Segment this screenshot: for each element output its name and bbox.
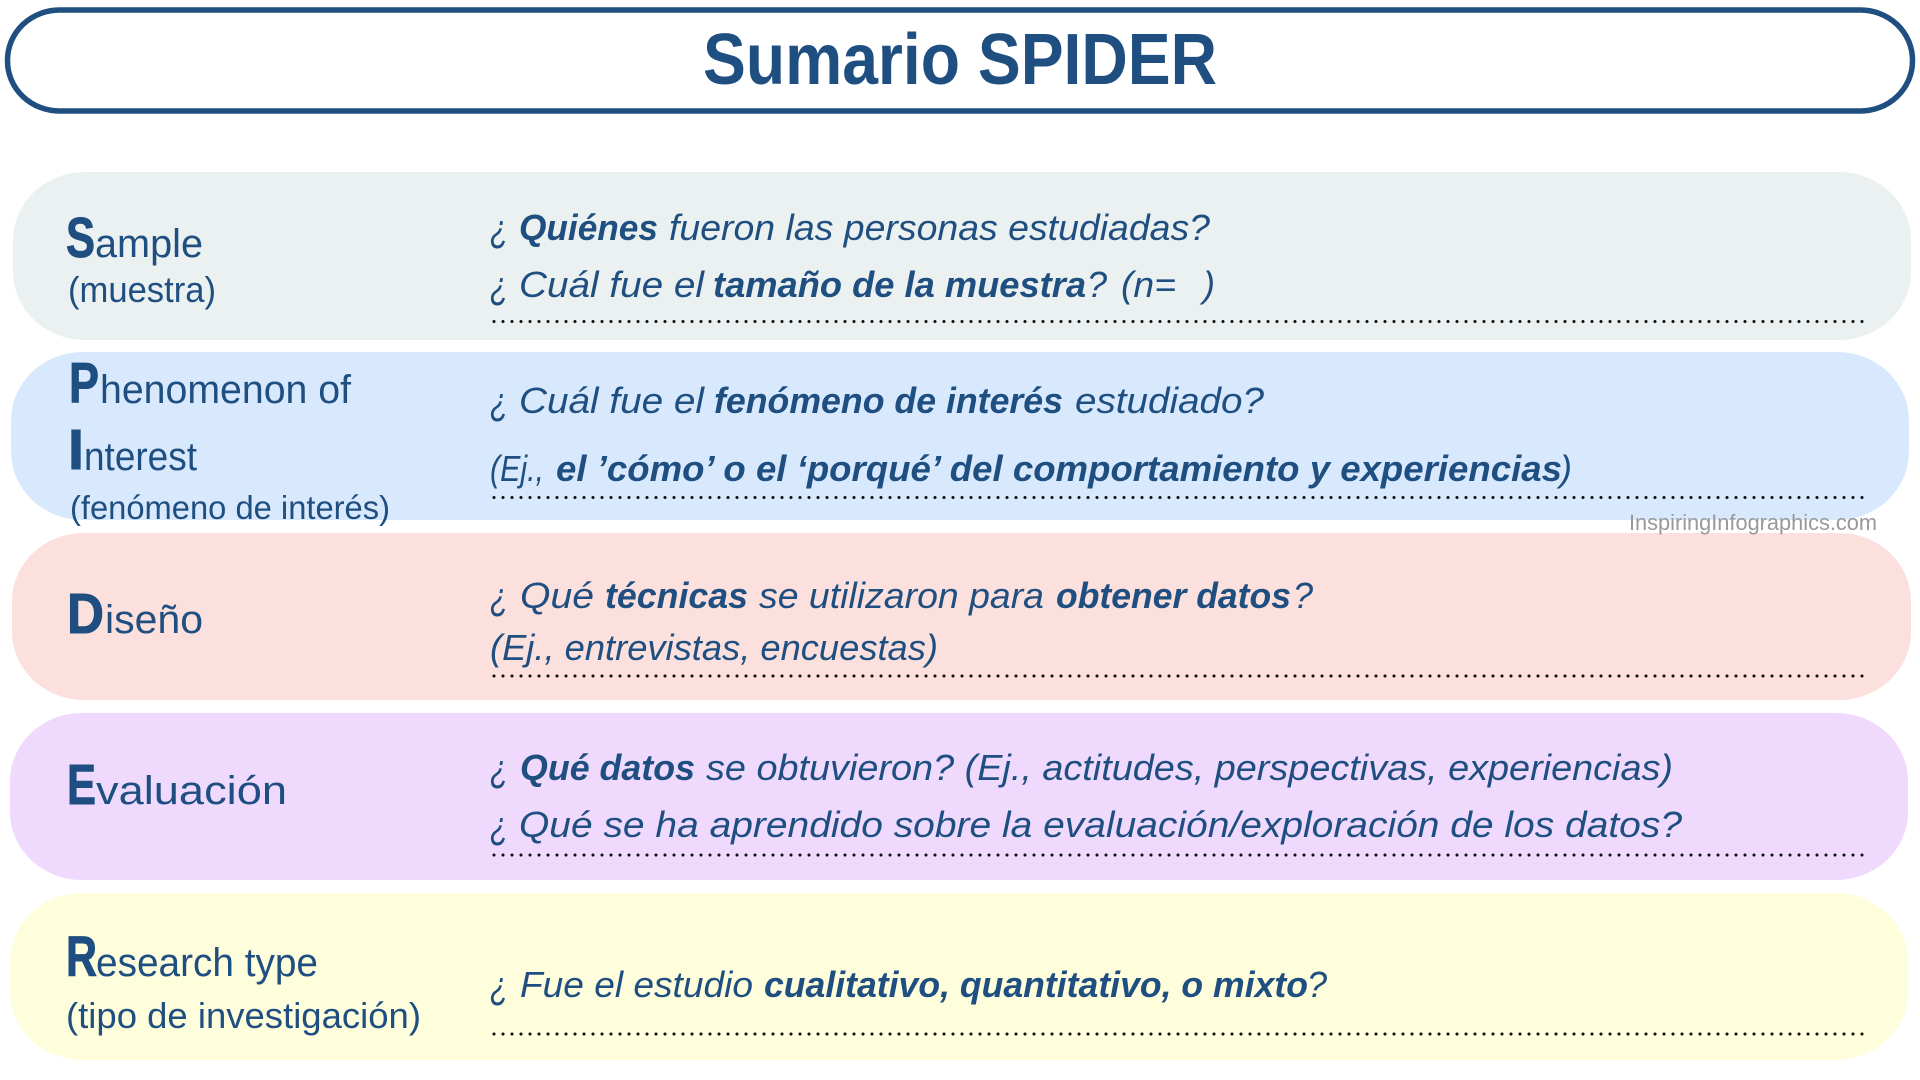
question: data: se obtuvieron? (Ej., actitudes, perspectivas, experiencias): [706, 747, 1673, 788]
question: sample size: (n=: [1121, 264, 1176, 305]
question: sample size: tamaño de la muestra: [713, 264, 1086, 305]
question: learning: Qué se ha aprendido sobre la evaluación/exploración de los datos?: [519, 804, 1682, 845]
panel: Research type: [10, 893, 1908, 1060]
label: Phenomenon of Interest: [68, 351, 390, 526]
question: phenomenon: Cuál fue el: [519, 380, 705, 421]
label: Research type: (tipo de investigación): [66, 995, 421, 1036]
label: Phenomenon of Interest: nterest: [84, 435, 197, 479]
question: techniques: obtener datos: [1056, 575, 1291, 616]
question: example: (Ej.,: [490, 448, 544, 489]
question: sample size: [490, 264, 1215, 308]
label: Sample (muestra): ample: [95, 222, 203, 266]
question: study type: Fue el estudio: [520, 964, 753, 1005]
label: Phenomenon of Interest: P: [69, 351, 99, 415]
question: techniques: se utilizaron para: [759, 575, 1044, 616]
question: who: ¿: [490, 208, 508, 251]
watermark: InspiringInfographics.com: [1629, 510, 1877, 535]
question: learning: ¿: [490, 805, 508, 848]
panel: Sample: [13, 172, 1911, 340]
panel: Phenomenon of Interest: [11, 351, 1909, 526]
label: Sample (muestra): S: [66, 206, 95, 270]
panel: Diseño: [12, 533, 1911, 700]
label: Sample (muestra): (muestra): [68, 269, 216, 310]
question: techniques: [490, 575, 1313, 619]
question: phenomenon: fenómeno de interés: [714, 380, 1063, 421]
label: Phenomenon of Interest: (fenómeno de interés): [70, 489, 390, 526]
question: phenomenon: [490, 380, 1264, 424]
question: example: ): [1556, 448, 1572, 489]
label: Diseño: iseño: [105, 598, 203, 642]
question: who: [490, 207, 1210, 251]
label: Diseño: D: [67, 582, 104, 646]
label: Diseño: [67, 582, 203, 646]
label: Evaluación: valuación: [96, 769, 287, 813]
question: example: (Ej., entrevistas, encuestas): [490, 627, 938, 668]
question: data: Qué datos: [520, 747, 695, 788]
question: techniques: Qué: [520, 575, 594, 616]
question: sample size: ¿: [490, 265, 508, 308]
label: Sample (muestra): [66, 206, 216, 310]
question: who: fueron las personas estudiadas?: [669, 207, 1210, 248]
question: sample size: Cuál fue el: [519, 264, 705, 305]
label: Research type: esearch type: [96, 941, 318, 985]
question: phenomenon: estudiado?: [1075, 380, 1264, 421]
label: Evaluación: [67, 753, 287, 817]
question: study type: ?: [1307, 964, 1327, 1005]
question: techniques: técnicas: [605, 575, 748, 616]
question: data: ¿: [490, 748, 508, 791]
label: Evaluación: E: [67, 753, 96, 817]
question: sample size: ?: [1087, 264, 1107, 305]
title banner: [8, 10, 1912, 111]
question: study type: [490, 964, 1327, 1008]
title: Sumario SPIDER: [703, 20, 1217, 100]
question: techniques: ?: [1293, 575, 1313, 616]
question: who: Quiénes: [519, 207, 658, 248]
question: study type: cualitativo, quantitativo, o mixto: [764, 964, 1308, 1005]
label: Phenomenon of Interest: henomenon of: [100, 368, 352, 412]
question: phenomenon: ¿: [490, 381, 508, 424]
label: Research type: R: [66, 925, 97, 989]
question: study type: ¿: [490, 965, 508, 1008]
question: sample size: ): [1199, 264, 1215, 305]
question: techniques: ¿: [490, 576, 508, 619]
question: example: el ’cómo’ o el ‘porqué’ del comportamiento y experiencias: [556, 448, 1562, 489]
panel: Evaluación: [10, 713, 1908, 880]
label: Research type: [66, 925, 421, 1036]
label: Phenomenon of Interest: I: [68, 418, 84, 482]
